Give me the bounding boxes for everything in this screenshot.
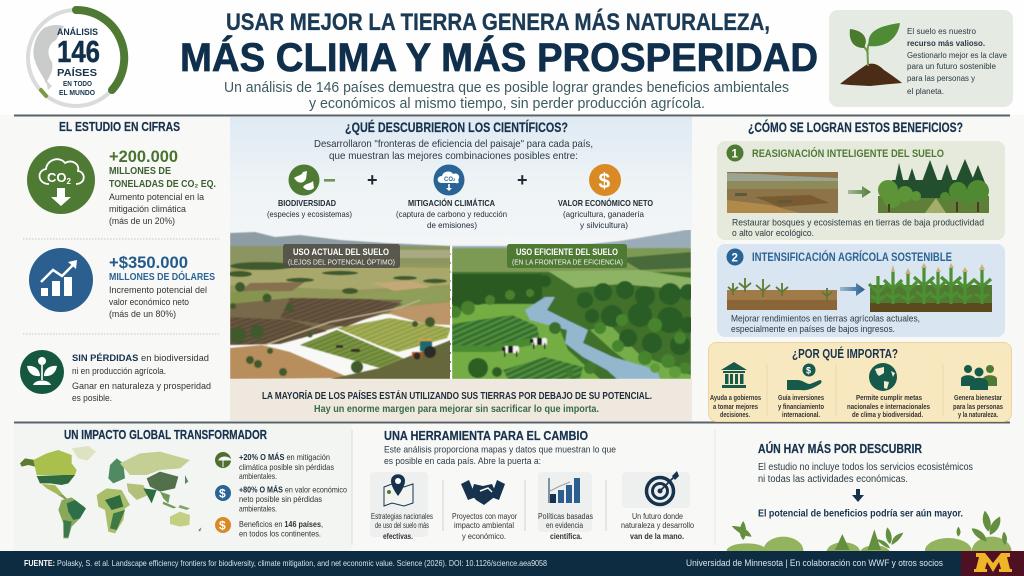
title: MÁS CLIMA Y MÁS PROSPERIDAD — [180, 35, 818, 80]
label: mitigación climática — [396, 197, 507, 230]
text: gobiernos — [710, 395, 761, 419]
stat: dólares — [109, 253, 215, 320]
landscape: uso eficiente del suelo — [449, 229, 696, 379]
text: ni todas las actividades económicas. — [758, 474, 908, 485]
heading: AÚN HAY MÁS POR DESCUBRIR — [758, 441, 922, 456]
stat: emisiones: TONELADAS DE CO₂ EQ. — [109, 179, 216, 190]
panel: impacto global — [20, 428, 347, 538]
step heading: REASIGNACIÓN INTELIGENTE DEL SUELO — [752, 147, 944, 160]
legend: 146 países: en todos los continentes. — [239, 528, 321, 538]
badge: análisis 146 países: EN TODO — [63, 81, 93, 88]
label: mitigación climática: de emisiones) — [427, 220, 477, 230]
plus: + — [517, 170, 528, 190]
label: biodiversidad: (especies y ecosistemas) — [267, 209, 352, 219]
label: mitigación climática: MITIGACIÓN CLIMÁTICA — [408, 197, 495, 208]
callout: potencial — [230, 379, 692, 421]
stat: emisiones: Aumento potencial en la — [109, 192, 205, 203]
badge: análisis 146 países: ANÁLISIS — [57, 27, 98, 37]
text: Mejorar rendimientos en tierras agrícolas actuales, — [731, 314, 920, 324]
label: valor económico neto: (agricultura, ganadería — [563, 209, 644, 219]
stat: emisiones: mitigación climática — [109, 204, 187, 215]
footer — [0, 551, 1024, 576]
tile: proyectos: Proyectos con mayor — [452, 512, 517, 521]
icon: plant — [20, 350, 64, 394]
legend: mitigación — [215, 452, 334, 481]
arrow — [840, 283, 865, 296]
text — [732, 218, 984, 239]
icon: bar chart — [549, 478, 580, 503]
label: uso actual del suelo: USO ACTUAL DEL SUELO — [293, 247, 389, 257]
label: mitigación climática: (captura de carbono y reducción — [396, 209, 507, 219]
panel: una herramienta para el cambio — [370, 428, 694, 541]
subtitle — [224, 79, 789, 112]
tile: futuro: van de la mano. — [630, 532, 684, 541]
number badge 2 — [726, 248, 744, 266]
stat: emisiones: (más de un 20%) — [109, 216, 175, 227]
text: gobiernos: decisiones. — [720, 412, 750, 419]
panel: aún hay más por descubrir — [727, 441, 1012, 567]
text: el suelo: el planeta. — [907, 87, 944, 96]
text: metas: de clima y biodiversidad. — [852, 412, 923, 419]
tile: políticas — [538, 472, 593, 541]
legend: valor económico: +80% O MÁS en valor económico — [239, 484, 347, 494]
icon: mitigación climática: CO2 — [444, 177, 456, 183]
title: USAR MEJOR LA TIERRA GENERA MÁS NATURALEZA, — [226, 8, 770, 36]
stat: dólares: valor económico neto — [109, 297, 189, 308]
text — [758, 462, 973, 485]
title — [180, 8, 818, 80]
label: uso eficiente del suelo: (EN LA FRONTERA DE EFICIENCIA) — [512, 260, 623, 266]
conclusion: El potencial de beneficios podría ser aún mayor. — [758, 508, 963, 520]
heading: UN IMPACTO GLOBAL TRANSFORMADOR — [64, 428, 267, 442]
label: uso eficiente del suelo: USO EFICIENTE DEL SUELO — [516, 247, 618, 257]
image: sparse crops — [727, 278, 837, 310]
legend: mitigación: climática posible sin pérdidas — [239, 462, 334, 472]
text: el suelo: Gestionarlo mejor es la clave — [907, 51, 1008, 60]
text: inversiones: internacional. — [782, 412, 820, 419]
panel: el estudio en cifras — [20, 120, 219, 404]
text: inversiones: Guía inversiones — [778, 395, 824, 402]
panel: por qué importa — [708, 342, 1012, 422]
decoration: plants — [727, 511, 1012, 567]
text: inversiones — [778, 395, 824, 419]
image: dense corn — [869, 263, 992, 312]
intro text — [314, 138, 593, 162]
text: sin pérdidas: ni en producción agrícola. — [72, 366, 166, 377]
tile: políticas: en evidencia — [546, 521, 583, 530]
number badge 1: 1 — [732, 148, 738, 160]
legend: valor económico — [215, 484, 347, 514]
tile: proyectos — [452, 480, 517, 541]
text: metas — [847, 395, 930, 419]
intro text: que muestran las mejores combinaciones posibles entre: — [329, 150, 578, 162]
number badge 2: 2 — [732, 252, 738, 264]
legend: valor económico: neto posible sin pérdidas — [239, 494, 322, 504]
logo: Minnesota M — [974, 553, 1012, 572]
tile: futuro — [621, 471, 694, 541]
label: valor económico neto — [558, 197, 653, 230]
intro text: Este análisis proporciona mapas y datos que muestran lo que — [384, 444, 616, 456]
image: degraded land — [727, 172, 838, 213]
callout: potencial: Hay un enorme margen para mejorar sin sacrificar lo que importa. — [314, 403, 599, 415]
label: uso eficiente del suelo — [507, 244, 627, 268]
step heading: INTENSIFICACIÓN AGRÍCOLA SOSTENIBLE — [752, 251, 952, 264]
icon: people — [961, 365, 997, 390]
stat: emisiones: +200.000 — [109, 147, 178, 166]
panel: reasignación inteligente — [717, 141, 1005, 240]
text: el suelo: para las personas y — [907, 74, 975, 83]
stat: dólares: MILLONES DE DÓLARES — [109, 270, 215, 283]
tile: políticas: Políticas basadas — [538, 512, 593, 521]
text: El estudio no incluye todos los servicios ecosistémicos — [758, 462, 973, 473]
plus: + — [367, 170, 378, 190]
text: gobiernos: Ayuda a gobiernos — [710, 395, 761, 402]
icon: hand with coin: $ — [806, 366, 811, 376]
badge: análisis 146 países — [28, 10, 124, 106]
badge: análisis 146 países: EL MUNDO — [59, 90, 96, 97]
partners: Universidad de Minnesota | En colaboración con WWF y otros socios — [686, 558, 943, 569]
tile: estrategias — [370, 472, 433, 541]
icon: handshake — [461, 480, 505, 505]
icon: target — [646, 471, 679, 504]
subtitle: Un análisis de 146 países demuestra que es posible lograr grandes beneficios ambientales — [224, 79, 789, 96]
icon: growth chart — [29, 248, 93, 312]
label: valor económico neto: y silvicultura) — [580, 220, 628, 230]
legend: mitigación: +20% O MÁS en mitigación — [239, 452, 330, 462]
heading: ¿QUÉ DESCUBRIERON LOS CIENTÍFICOS? — [345, 119, 568, 135]
panel: intensificación agrícola — [717, 244, 1005, 337]
icon: globe — [869, 363, 897, 391]
text: gobiernos: a tomar mejores — [713, 404, 758, 411]
heading: ¿POR QUÉ IMPORTA? — [792, 346, 898, 361]
arrow — [848, 186, 871, 198]
stat: dólares: (más de un 80%) — [109, 309, 176, 320]
icon: CO2 cloud — [27, 146, 95, 214]
label: uso actual del suelo — [283, 244, 400, 268]
tile: proyectos: y económico. — [462, 532, 506, 541]
source: FUENTE: Polasky, S. et al. Landscape efficiency frontiers for biodiversity, climate mitigation, and net economic value. Science (2026). DOI: 10.1126/science.aea9058 — [24, 558, 547, 568]
text: especialmente en países de bajos ingresos. — [731, 324, 895, 335]
icon: map pin — [384, 474, 413, 506]
icon: CO2 cloud: 2 — [66, 177, 72, 186]
label: uso actual del suelo: (LEJOS DEL POTENCIAL ÓPTIMO) — [288, 258, 395, 266]
text — [731, 314, 920, 335]
text: el suelo — [907, 27, 1008, 96]
icon: valor económico: $ — [598, 170, 610, 193]
image: restored forest — [878, 159, 989, 213]
panel: qué descubrieron los científicos — [228, 117, 696, 421]
tile: futuro: naturaleza y desarrollo — [621, 521, 694, 530]
text: Restaurar bosques y ecosistemas en tierras de baja productividad — [732, 218, 984, 228]
intro text — [384, 444, 616, 467]
stat: emisiones: MILLONES DE — [109, 166, 171, 177]
text: sin pérdidas: es posible. — [72, 393, 112, 404]
label: biodiversidad: BIODIVERSIDAD — [278, 198, 336, 208]
text: el suelo: El suelo es nuestro — [907, 27, 977, 36]
icon: government building — [721, 362, 747, 388]
landscape: uso actual del suelo — [228, 232, 451, 379]
tractor — [412, 339, 436, 360]
icon: mitigación climática — [434, 164, 464, 196]
icon: seedling on soil — [840, 23, 902, 86]
label: biodiversidad — [267, 198, 352, 219]
heading: cómo se logran: ¿CÓMO SE LOGRAN ESTOS BENEFICIOS? — [748, 120, 963, 135]
icon: hand with coin — [787, 364, 822, 390]
legend: valor económico: $ — [219, 486, 226, 500]
text: o alto valor ecológico. — [732, 228, 814, 239]
stat: emisiones — [109, 147, 216, 227]
legend: 146 países: $ — [219, 518, 226, 532]
legend: 146 países — [215, 517, 323, 538]
stat: dólares: +$350.000 — [109, 253, 188, 272]
text: metas: Permite cumplir metas — [856, 395, 922, 402]
tile: estrategias: de uso del suelo más — [375, 521, 429, 530]
text: bienestar: y la naturaleza. — [958, 412, 998, 419]
panel: el suelo — [829, 10, 1013, 107]
intro text: Desarrollaron "fronteras de eficiencia del paisaje" para cada país, — [314, 138, 593, 150]
world map — [20, 446, 202, 538]
badge: análisis 146 países: 146 — [57, 34, 100, 69]
stat: dólares: Incremento potencial del — [109, 285, 207, 296]
tile: estrategias: efectivas. — [383, 532, 413, 541]
arrow — [852, 489, 864, 502]
text: bienestar — [953, 395, 1003, 419]
text: sin pérdidas: SIN PÉRDIDAS en biodiversidad — [72, 353, 209, 364]
text: inversiones: y financiamiento — [778, 404, 824, 411]
number badge 1 — [726, 144, 744, 162]
intro text: es posible en cada país. Abre la puerta a: — [384, 456, 541, 467]
text: sin pérdidas — [72, 353, 211, 404]
heading: EL ESTUDIO EN CIFRAS — [59, 120, 180, 134]
tile: proyectos: impacto ambiental — [454, 521, 514, 530]
tile: estrategias: Estrategias nacionales — [371, 512, 433, 521]
tile: futuro: Un futuro donde — [632, 512, 683, 521]
legend: valor económico: ambientales. — [239, 504, 277, 514]
text: bienestar: Genera bienestar — [954, 395, 1002, 402]
icon: valor económico — [589, 164, 621, 196]
text: metas: nacionales e internacionales — [847, 404, 930, 411]
text: el suelo: para un futuro sostenible — [907, 62, 997, 71]
subtitle: y económicos al mismo tiempo, sin perder producción agrícola. — [309, 95, 705, 112]
tile: políticas: científica. — [550, 532, 582, 541]
icon: biodiversidad — [288, 164, 335, 196]
text: el suelo: recurso más valioso. — [907, 39, 985, 48]
text: bienestar: para las personas — [953, 404, 1003, 411]
label: valor económico neto: VALOR ECONÓMICO NETO — [558, 197, 653, 208]
heading: UNA HERRAMIENTA PARA EL CAMBIO — [384, 428, 588, 443]
text: sin pérdidas: Ganar en naturaleza y prosperidad — [72, 381, 211, 392]
icon: CO2 cloud: CO — [47, 170, 66, 185]
legend: mitigación: ambientales. — [239, 471, 277, 481]
badge: análisis 146 países: PAÍSES — [57, 66, 97, 79]
legend: 146 países: Beneficios en 146 países, — [239, 519, 323, 529]
callout: potencial: LA MAYORÍA DE LOS PAÍSES ESTÁN UTILIZANDO SUS TIERRAS POR DEBAJO DE SU POTENCIAL. — [262, 389, 652, 402]
